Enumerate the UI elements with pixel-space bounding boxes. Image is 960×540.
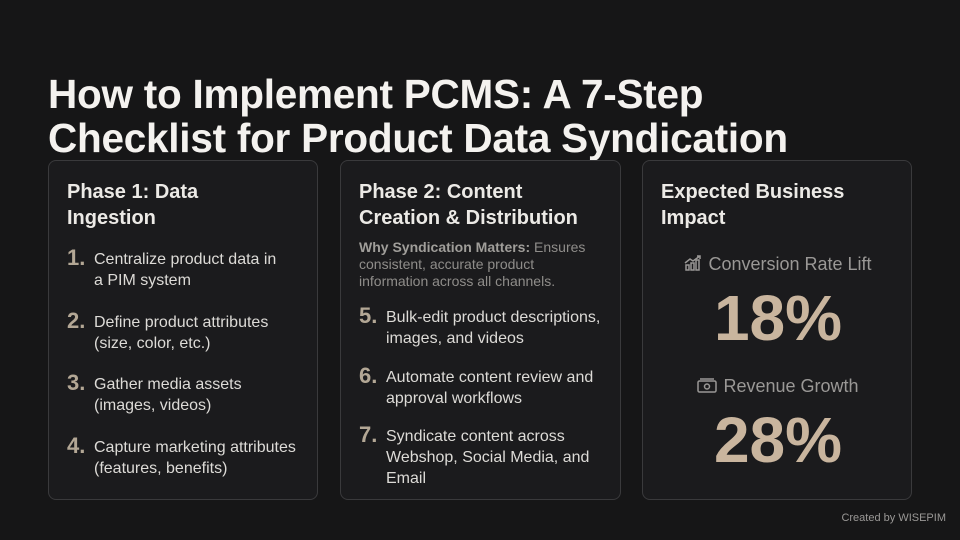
- title: [48, 71, 788, 161]
- step 6: 6.: [359, 363, 377, 388]
- heading: phase 1: [67, 181, 198, 229]
- stat: 18%: 18%: [714, 282, 842, 354]
- step 1: 1.: [67, 245, 85, 270]
- panel: business impact: [642, 160, 912, 500]
- why syndication matters: Why Syndication Matters: Ensures consistent, accurate product information across all channels.: [359, 239, 585, 289]
- heading: phase 1: Phase 1: Data: [67, 181, 198, 203]
- step 3: Gather media assets: [94, 376, 242, 393]
- heading: impact: Impact: [661, 207, 725, 229]
- stat: 28%: 28%: [714, 404, 842, 476]
- step 7: [359, 422, 589, 487]
- title: Checklist for Product Data Syndication: [48, 115, 788, 161]
- step 4: 4.: [67, 433, 85, 458]
- step 6: [359, 363, 593, 407]
- step 2: 2.: [67, 308, 85, 333]
- step 7: 7.: [359, 422, 377, 447]
- heading: impact: [661, 181, 844, 229]
- label: conversion: Conversion Rate Lift: [708, 254, 872, 274]
- heading: phase 1: Ingestion: [67, 207, 156, 229]
- step 6: Automate content review and: [386, 369, 593, 386]
- step 5: Bulk-edit product descriptions,: [386, 309, 600, 326]
- heading: impact: Expected Business: [661, 181, 844, 203]
- step 1: Centralize product data in: [94, 251, 276, 268]
- step 1: a PIM system: [94, 272, 191, 289]
- label: revenue: Revenue Growth: [723, 376, 859, 396]
- step 3: [67, 370, 242, 414]
- panel: phase 2: [340, 160, 621, 500]
- step 1: [67, 245, 276, 289]
- step 7: Webshop, Social Media, and: [386, 449, 589, 466]
- title: How to Implement PCMS: A 7-Step: [48, 71, 703, 117]
- heading: phase 2: Phase 2: Content: [359, 181, 522, 203]
- step 7: Email: [386, 470, 426, 487]
- step 4: [67, 433, 296, 477]
- step 6: approval workflows: [386, 390, 522, 407]
- step 2: [67, 308, 268, 352]
- step 3: 3.: [67, 370, 85, 395]
- heading: phase 2: Creation & Distribution: [359, 207, 578, 229]
- step 7: Syndicate content across: [386, 428, 565, 445]
- step 5: 5.: [359, 303, 377, 328]
- step 4: Capture marketing attributes: [94, 439, 296, 456]
- step 5: [359, 303, 600, 347]
- step 2: Define product attributes: [94, 314, 268, 331]
- step 4: (features, benefits): [94, 460, 227, 477]
- panel: phase 1: [48, 160, 318, 500]
- step 3: (images, videos): [94, 397, 211, 414]
- step 5: images, and videos: [386, 330, 524, 347]
- footer credit: Created by WISEPIM: [841, 512, 946, 524]
- step 2: (size, color, etc.): [94, 335, 210, 352]
- heading: phase 2: [359, 181, 578, 229]
